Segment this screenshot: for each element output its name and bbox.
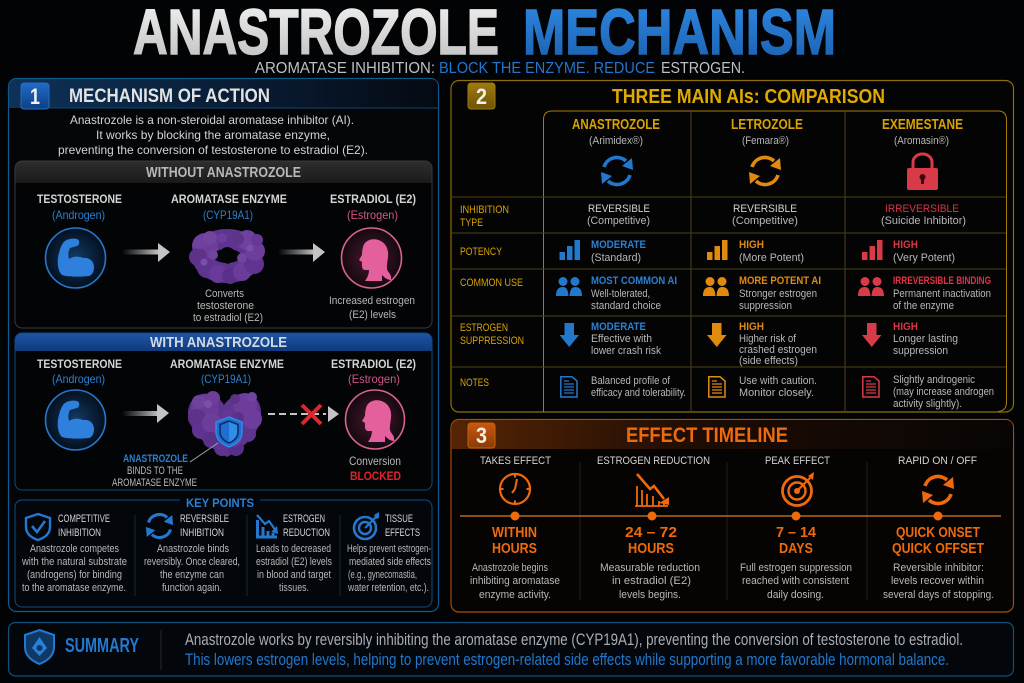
row: inhibition type: (Competitive)	[732, 215, 798, 227]
timeline step: rapid on / off	[883, 455, 994, 601]
subtitle: AROMATASE INHIBITION:	[255, 60, 435, 77]
row: inhibition type: INHIBITION	[460, 204, 509, 216]
key point: estrogen reduction: tissues.	[279, 582, 309, 594]
key point: estrogen reduction	[256, 513, 332, 594]
timeline step: takes effect: inhibiting aromatase	[470, 575, 560, 587]
row: potency	[460, 239, 955, 264]
sub-panel: with anastrozole	[15, 333, 432, 490]
row: inhibition type: REVERSIBLE	[588, 203, 650, 215]
testosterone label: TESTOSTERONE	[37, 192, 122, 206]
estradiol label	[331, 357, 416, 386]
intro text: Anastrozole is a non-steroidal aromatase inhibitor (AI).	[70, 113, 354, 127]
anastrozole binding callout	[112, 453, 197, 489]
icon: summary shield	[25, 630, 54, 664]
title	[133, 0, 836, 68]
row: potency: (Standard)	[591, 252, 641, 264]
row: potency: (More Potent)	[739, 252, 804, 264]
heading: mechanism of action: MECHANISM OF ACTION	[69, 86, 270, 107]
section header band	[9, 79, 438, 108]
enzyme label: (CYP19A1)	[203, 208, 253, 222]
row: common use: MOST COMMON AI	[591, 275, 677, 287]
icon: enzyme blocked by shield	[188, 391, 262, 462]
row: inhibition type: (Suicide Inhibitor)	[881, 215, 966, 227]
row: common use: MORE POTENT AI	[739, 275, 821, 287]
heading: comparison: THREE MAIN AIs: COMPARISON	[612, 86, 885, 108]
arrow	[122, 243, 170, 262]
row: estrogen suppression: Longer lasting	[893, 333, 958, 345]
icon: estrogen head	[346, 390, 404, 449]
row: potency: HIGH	[739, 239, 764, 251]
timeline step: estrogen reduction: ESTROGEN REDUCTION	[597, 455, 710, 467]
icon: muscle	[46, 390, 106, 450]
key point: tissue effects	[347, 512, 431, 594]
row: potency: MODERATE	[591, 239, 646, 251]
estradiol label: (Estrogen)	[347, 208, 398, 222]
timeline step: estrogen reduction: levels begins.	[619, 589, 681, 601]
key point: competitive inhibition: Anastrozole competes	[30, 543, 119, 555]
badge 2: 2	[476, 84, 487, 109]
column: anastrozole header: (Arimidex®)	[589, 135, 643, 147]
row: estrogen suppression: HIGH	[739, 321, 764, 333]
row: common use	[460, 275, 991, 312]
timeline step: peak effect: DAYS	[779, 541, 813, 557]
key point: tissue effects: Helps prevent estrogen-	[347, 543, 431, 555]
enzyme caption	[193, 288, 263, 324]
conversion blocked: BLOCKED	[350, 469, 401, 483]
anastrozole binding callout: BINDS TO THE	[127, 465, 183, 477]
subtitle: ESTROGEN.	[661, 60, 745, 77]
sub-panel heading: WITH ANASTROZOLE	[150, 335, 287, 351]
badge 3	[468, 423, 495, 448]
row: common use: suppression	[739, 300, 792, 312]
icon: aromatase enzyme	[189, 230, 265, 284]
testosterone label	[37, 192, 122, 222]
row: estrogen suppression: ESTROGEN	[460, 322, 508, 334]
testosterone label: (Androgen)	[52, 208, 105, 222]
key point: competitive inhibition: to the aromatase enzyme.	[22, 582, 126, 594]
timeline step: peak effect	[740, 455, 852, 601]
row: inhibition type	[460, 203, 966, 229]
enzyme caption: Converts	[205, 288, 244, 300]
badge 2	[468, 83, 495, 109]
timeline step: takes effect	[470, 455, 560, 601]
enzyme label: (CYP19A1)	[201, 372, 251, 386]
key point: estrogen reduction: ESTROGEN	[283, 513, 325, 525]
timeline step: peak effect: Full estrogen suppression	[740, 562, 852, 574]
row: estrogen suppression: Effective with	[591, 333, 652, 345]
column: letrozole header: LETROZOLE	[731, 117, 803, 133]
intro text: preventing the conversion of testosterone to estradiol (E2).	[58, 143, 368, 157]
estradiol caption: Increased estrogen	[329, 295, 415, 307]
icon: muscle	[46, 228, 106, 288]
row: estrogen suppression: crashed estrogen	[739, 344, 817, 356]
row: notes: Balanced profile of	[591, 375, 671, 387]
panel: mechanism of action	[8, 78, 438, 612]
row: inhibition type: TYPE	[460, 217, 483, 229]
row: inhibition type: (Competitive)	[587, 215, 650, 227]
row: estrogen suppression: MODERATE	[591, 321, 646, 333]
key point: reversible inhibition: REVERSIBLE	[180, 513, 229, 525]
key point: competitive inhibition	[21, 513, 127, 594]
enzyme caption: to estradiol (E2)	[193, 312, 263, 324]
key point: estrogen reduction: estradiol (E2) levels	[256, 556, 332, 568]
timeline step: takes effect: enzyme activity.	[479, 589, 551, 601]
row: notes: Use with caution.	[739, 375, 817, 387]
row: common use: Stronger estrogen	[739, 288, 817, 300]
timeline step: estrogen reduction	[597, 455, 710, 601]
timeline step: rapid on / off: several days of stopping.	[883, 589, 994, 601]
key point: estrogen reduction: REDUCTION	[283, 527, 330, 539]
blocked dashed arrow	[268, 405, 339, 424]
timeline step: takes effect: TAKES EFFECT	[480, 455, 551, 467]
key point: reversible inhibition: Anastrozole binds	[157, 543, 229, 555]
panel: comparison	[451, 80, 1014, 412]
row: notes: Slightly androgenic	[893, 374, 975, 386]
row: common use: IRREVERSIBLE BINDING	[893, 275, 991, 287]
key point: competitive inhibition: with the natural substrate	[21, 556, 127, 568]
column: exemestane header	[882, 117, 963, 190]
timeline step: rapid on / off: Reversible inhibitor:	[893, 562, 984, 574]
column: letrozole header: (Femara®)	[742, 135, 789, 147]
row: notes: Monitor closely.	[739, 387, 814, 399]
timeline step: peak effect: daily dosing.	[767, 589, 824, 601]
row: common use: Well-tolerated,	[591, 288, 650, 300]
row: common use: COMMON USE	[460, 277, 523, 289]
testosterone label: (Androgen)	[52, 372, 105, 386]
estradiol label	[330, 192, 416, 222]
row: notes: efficacy and tolerability.	[591, 387, 686, 399]
sub-panel: key points	[15, 496, 432, 607]
timeline step: estrogen reduction: Measurable reduction	[600, 562, 700, 574]
enzyme label: AROMATASE ENZYME	[171, 192, 287, 206]
column: letrozole header	[731, 117, 803, 185]
arrow	[278, 243, 325, 262]
row: inhibition type: IRREVERSIBLE	[885, 203, 959, 215]
key point: reversible inhibition: INHIBITION	[180, 527, 224, 539]
comparison table grid	[452, 111, 1006, 412]
row: potency: HIGH	[893, 239, 918, 251]
row: estrogen suppression: lower crash risk	[591, 345, 661, 357]
summary label: SUMMARY	[65, 635, 139, 657]
row: inhibition type: REVERSIBLE	[733, 203, 797, 215]
row: common use: Permanent inactivation	[893, 288, 991, 300]
timeline step: rapid on / off: RAPID ON / OFF	[898, 455, 977, 467]
key point: competitive inhibition: (androgens) for binding	[27, 569, 122, 581]
key point: competitive inhibition: COMPETITIVE	[58, 513, 110, 525]
timeline header band	[452, 420, 1013, 449]
badge 1: 1	[30, 84, 40, 109]
row: estrogen suppression: HIGH	[893, 321, 918, 333]
timeline step: peak effect: PEAK EFFECT	[765, 455, 830, 467]
timeline step: rapid on / off: QUICK OFFSET	[892, 541, 984, 557]
enzyme label	[171, 192, 287, 222]
key point: reversible inhibition: reversibly. Once cleared,	[144, 556, 240, 568]
intro text	[58, 113, 368, 157]
estradiol caption	[329, 295, 415, 321]
estradiol label: (Estrogen)	[348, 372, 400, 386]
column: anastrozole header: ANASTROZOLE	[572, 117, 660, 133]
timeline step: peak effect: reached with consistent	[742, 575, 849, 587]
badge 1	[21, 83, 49, 109]
enzyme label: AROMATASE ENZYME	[170, 357, 284, 371]
panel: effect timeline	[451, 420, 1014, 612]
key point: estrogen reduction: in blood and target	[257, 569, 331, 581]
anastrozole binding callout: ANASTROZOLE	[123, 453, 188, 465]
row: notes: activity slightly).	[893, 398, 962, 410]
column: exemestane header: EXEMESTANE	[882, 117, 963, 133]
row: estrogen suppression: suppression	[893, 345, 948, 357]
row: notes: (may increase androgen	[893, 386, 994, 398]
estradiol label: ESTRADIOL (E2)	[330, 192, 416, 206]
timeline step: rapid on / off: levels recover within	[891, 575, 984, 587]
key point: competitive inhibition: INHIBITION	[58, 527, 101, 539]
enzyme caption: testosterone	[197, 300, 254, 312]
conversion blocked: Conversion	[349, 454, 401, 468]
key point: reversible inhibition: function again.	[162, 582, 222, 594]
icon: estrogen head	[342, 228, 402, 288]
conversion blocked	[349, 454, 401, 483]
column: anastrozole header	[572, 117, 660, 185]
arrow	[122, 404, 169, 423]
row: common use: standard choice	[591, 300, 661, 312]
testosterone label: TESTOSTERONE	[37, 357, 122, 371]
testosterone label	[37, 357, 122, 386]
timeline step: rapid on / off: QUICK ONSET	[896, 525, 980, 541]
row: estrogen suppression: Higher risk of	[739, 333, 797, 345]
estradiol label: ESTRADIOL (E2)	[331, 357, 416, 371]
row: notes: NOTES	[460, 377, 489, 389]
key point: reversible inhibition	[144, 513, 240, 594]
row: potency: POTENCY	[460, 246, 503, 258]
timeline step: estrogen reduction: in estradiol (E2)	[612, 575, 691, 587]
timeline step: estrogen reduction: HOURS	[628, 541, 674, 557]
timeline step: peak effect: 7 – 14	[776, 525, 816, 541]
row: estrogen suppression: SUPPRESSION	[460, 335, 524, 347]
subtitle	[255, 60, 745, 77]
heading: effect timeline: EFFECT TIMELINE	[626, 424, 788, 447]
row: estrogen suppression	[460, 321, 958, 367]
timeline step: takes effect: WITHIN	[492, 525, 537, 541]
key point: tissue effects: mediated side effects	[349, 556, 431, 568]
enzyme label	[170, 357, 284, 386]
anastrozole binding callout: AROMATASE ENZYME	[112, 477, 197, 489]
key points heading: KEY POINTS	[186, 496, 254, 510]
badge 3: 3	[476, 423, 487, 448]
row: notes	[460, 374, 994, 410]
timeline step: takes effect: Anastrozole begins	[472, 562, 548, 574]
row: estrogen suppression: (side effects)	[739, 355, 798, 367]
timeline step: estrogen reduction: 24 – 72	[625, 525, 677, 541]
timeline step: takes effect: HOURS	[492, 541, 537, 557]
row: common use: of the enzyme	[893, 300, 954, 312]
sub-panel: without anastrozole	[15, 161, 432, 328]
key point: tissue effects: water retention, etc.).	[347, 582, 429, 594]
sub-panel heading: WITHOUT ANASTROZOLE	[146, 165, 301, 181]
column: exemestane header: (Aromasin®)	[894, 135, 949, 147]
timeline axis	[460, 512, 1001, 520]
summary text	[185, 631, 963, 669]
intro text: It works by blocking the aromatase enzyme,	[96, 128, 330, 142]
subtitle: BLOCK THE ENZYME. REDUCE	[439, 60, 655, 77]
key point: tissue effects: (e.g., gynecomastia,	[348, 569, 417, 581]
key point: tissue effects: EFFECTS	[385, 527, 420, 539]
estradiol caption: (E2) levels	[349, 309, 396, 321]
row: potency: (Very Potent)	[893, 252, 955, 264]
key point: estrogen reduction: Leads to decreased	[256, 543, 331, 555]
panel: summary	[8, 622, 1014, 676]
key point: reversible inhibition: the enzyme can	[160, 569, 224, 581]
key point: tissue effects: TISSUE	[385, 513, 413, 525]
